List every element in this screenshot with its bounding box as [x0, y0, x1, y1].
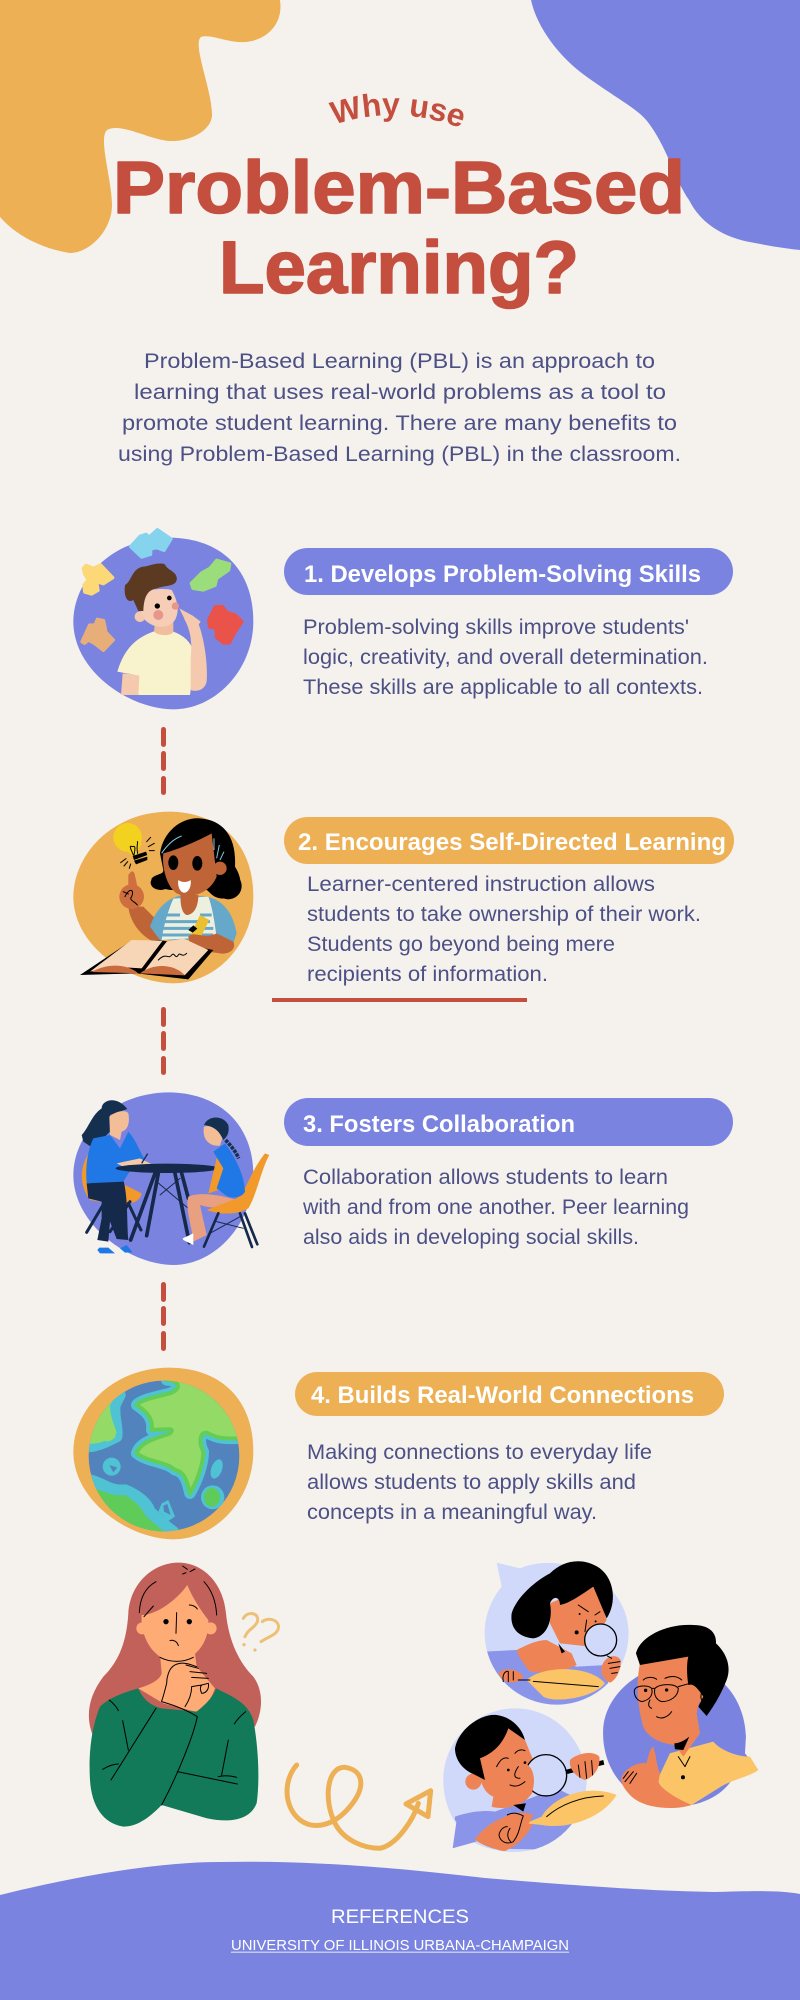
intro paragraph: learning that uses real-world problems as a tool to [134, 380, 666, 404]
body 2: students to take ownership of their work. [307, 902, 701, 926]
heading pill 4 [295, 1372, 724, 1416]
heading pill 3 [284, 1098, 733, 1146]
kicker: Why use: Why use [328, 94, 464, 126]
heading 1: 1. Develops Problem-Solving Skills [304, 561, 701, 588]
item 4 text [295, 1372, 724, 1524]
intro paragraph: using Problem-Based Learning (PBL) in the classroom. [118, 442, 681, 466]
icon: earth globe [73, 1368, 253, 1539]
person: man with magnifier and leaf [443, 1708, 617, 1852]
title line 1: Problem-Based [113, 146, 685, 229]
illustration: thinking woman with question marks [89, 1563, 278, 1827]
red rule [272, 998, 527, 1002]
icon: two people at a table [73, 1092, 269, 1265]
person: man with glasses [603, 1625, 758, 1808]
intro paragraph [118, 349, 681, 466]
heading 4: 4. Builds Real-World Connections [311, 1382, 694, 1409]
item 2 text [284, 817, 734, 986]
body 2: Students go beyond being mere [307, 932, 615, 956]
dashed connector 1 [161, 727, 166, 795]
item 1 text [284, 548, 733, 699]
title block [113, 94, 685, 310]
icon: girl with light bulb and book [73, 812, 253, 983]
body 4: allows students to apply skills and [307, 1470, 636, 1494]
illustration: swirl arrow [287, 1765, 431, 1848]
body 1: Problem-solving skills improve students' [303, 615, 689, 639]
icon: thinking boy with puzzle pieces [73, 530, 253, 709]
title line 2: Learning? [219, 226, 579, 309]
item 3 text [284, 1098, 733, 1249]
body 2: Learner-centered instruction allows [307, 872, 655, 896]
dashed connector 3 [161, 1282, 166, 1351]
footer band [0, 1862, 800, 2000]
person: woman with magnifier [483, 1561, 629, 1707]
body 1 [303, 615, 708, 699]
decorative blob: orange top-left [0, 0, 280, 253]
body 3 [302, 1165, 689, 1249]
decorative blob: blue top-right [531, 0, 800, 250]
body 1: logic, creativity, and overall determination. [303, 645, 708, 669]
body 3: Collaboration allows students to learn [303, 1165, 668, 1189]
body 3: with and from one another. Peer learning [302, 1195, 689, 1219]
heading pill 2 [284, 817, 734, 864]
intro paragraph: Problem-Based Learning (PBL) is an approach to [144, 349, 655, 373]
body 4 [307, 1440, 652, 1524]
heading 3: 3. Fosters Collaboration [303, 1111, 575, 1138]
intro paragraph: promote student learning. There are many benefits to [122, 411, 677, 435]
footer references: REFERENCES [331, 1907, 469, 1928]
body 1: These skills are applicable to all contexts. [303, 675, 703, 699]
illustration: three people with magnifying glasses [443, 1561, 758, 1852]
dashed connector 2 [161, 1007, 166, 1075]
body 4: concepts in a meaningful way. [307, 1500, 597, 1524]
footer references: UNIVERSITY OF ILLINOIS URBANA-CHAMPAIGN [231, 1937, 569, 1954]
body 4: Making connections to everyday life [307, 1440, 652, 1464]
footer references [231, 1907, 569, 1954]
body 2: recipients of information. [307, 962, 548, 986]
heading 2: 2. Encourages Self-Directed Learning [298, 829, 726, 856]
body 3: also aids in developing social skills. [303, 1225, 639, 1249]
heading pill 1 [284, 548, 733, 595]
body 2 [307, 872, 701, 986]
